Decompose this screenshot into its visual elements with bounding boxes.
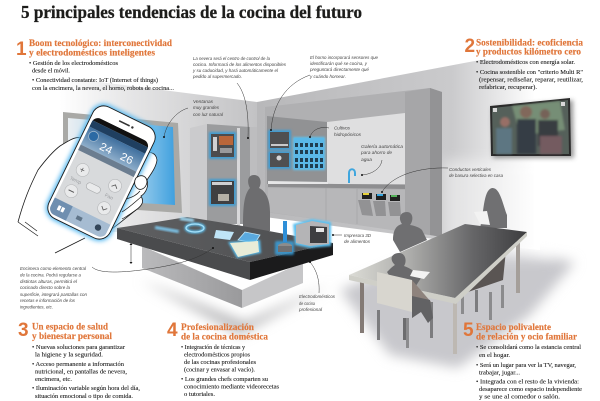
annotation: fridge: [192, 56, 287, 79]
annotation: professional appliances: de cocina: [299, 301, 315, 306]
annotation: automatic tap: Galería automática: [361, 144, 404, 149]
annotation: countertop: cocinado directo sobre la: [20, 285, 70, 290]
hand: [18, 138, 157, 253]
dining table: [349, 224, 527, 354]
phone glow: [41, 99, 162, 246]
island dark side: [250, 243, 333, 280]
heading 4: de la cocina doméstica: [181, 332, 268, 342]
seated woman silhouette: [480, 188, 507, 228]
window: [63, 112, 182, 213]
smart fridge: [190, 124, 257, 230]
remote buttons: Temp: [68, 175, 82, 186]
bullets 2: refabricar, recuperar).: [479, 84, 538, 91]
annotation leader lines: [92, 75, 448, 293]
hand holding smartphone: [18, 99, 162, 253]
remote buttons: [62, 161, 124, 217]
section 3: health and wellbeing: [18, 320, 141, 400]
heading 4: Profesionalización: [181, 323, 255, 333]
bullets 4: de las cocinas profesionales: [184, 359, 257, 366]
bullets 4: [181, 345, 280, 398]
annotation: professional appliances: Electrodomésticos: [299, 294, 336, 299]
temperature readouts: 24: [97, 141, 114, 157]
annotation: fridge: cocina. Informará de los alimentos disponibles: [193, 62, 287, 67]
bullets 4: • Los grandes chefs comparten su: [181, 376, 268, 383]
kitchen island: [117, 217, 333, 308]
bullets 2: • Cocina sostenible con "criterio Multi R": [476, 70, 583, 76]
bullets 5: • Se consolidará como la estancia central: [476, 345, 581, 351]
bullets 3: • Acceso permanente a información: [32, 361, 124, 368]
annotation: 3D printer: Impresora 3D: [344, 233, 372, 238]
number 1: 1: [16, 39, 27, 60]
bullets 5: • Integrada con el resto de la vivienda:: [476, 380, 579, 386]
annotation: 3D printer: de alimentos: [344, 239, 371, 244]
bullets 4: • Integración de técnicas y: [181, 345, 245, 351]
heading 3: [32, 322, 112, 342]
remote buttons: Fan: [104, 193, 114, 202]
bullets 1: • Gestión de los electrodomésticos: [29, 61, 119, 67]
kitchen illustration: [60, 60, 575, 368]
bullets 2: (repensar, rediseñar, reparar, reutilizar,: [479, 76, 584, 84]
bullets 3: situación emocional o tipo de comida.: [35, 394, 134, 400]
child silhouette: [387, 253, 421, 292]
phone body: [44, 102, 159, 243]
annotation: countertop: distintas alturas, permitirá el: [20, 279, 78, 284]
annotation: oven: y cuándo hornear.: [309, 74, 346, 79]
island front face: [117, 228, 250, 280]
bullets 1: con la encimera, la nevera, el horno, robots de cocina...: [32, 86, 175, 92]
annotation: automatic tap: para ahorro de: [360, 150, 393, 155]
remote buttons: +: [78, 164, 87, 175]
heading 2: Sostenibilidad: ecoficiencia: [476, 38, 583, 48]
bullets 1: [29, 61, 175, 92]
annotation: countertop: superficie, integrará pantallas con: [20, 292, 87, 297]
table top: [349, 224, 527, 298]
bullets 5: [476, 345, 582, 400]
table edge: [349, 232, 527, 304]
annotation: waste ducts: de basura selectiva en casa: [449, 173, 503, 178]
bullets 3: • Nuevas soluciones para garantizar: [32, 345, 125, 351]
3D food printer: [275, 221, 294, 255]
right wall: [257, 60, 540, 250]
thumb and fingers over phone: [135, 176, 147, 189]
annotation: countertop: recetas e información de los: [20, 298, 76, 303]
front chair: [377, 272, 433, 348]
heading 1: Boom tecnológico: interconectividad: [29, 39, 173, 49]
finger creases: [122, 191, 141, 219]
island countertop: [117, 217, 333, 262]
bullets 3: la higiene y la seguridad.: [35, 352, 104, 358]
bullets 5: y se une al comedor o salón.: [479, 394, 561, 400]
tab bar icons: [56, 205, 102, 232]
bullets 5: desaparece como espacio independiente: [479, 387, 582, 393]
bullets 3: [32, 345, 141, 400]
annotation: oven: preguntará directamente qué: [309, 67, 369, 72]
back wall unit: [265, 88, 442, 237]
touch surface screens: [155, 217, 261, 258]
fridge screen: order: [209, 179, 236, 206]
professional appliance: [293, 219, 331, 248]
annotation: windows: Ventanas: [193, 99, 214, 104]
heading 4: [181, 323, 268, 342]
annotation: windows: con luz natural: [193, 112, 224, 117]
back chair: [461, 240, 507, 320]
number 3: 3: [18, 320, 29, 341]
bullets 3: encimera, etc.: [35, 377, 73, 383]
number 5: 5: [463, 320, 474, 341]
seated man silhouette: [393, 212, 427, 252]
annotation: oven: identificarán qué se cocina, y: [310, 61, 368, 66]
annotation: hydroponic crops: hidropónicos: [334, 132, 362, 137]
paper: [410, 270, 430, 279]
bullets 1: desde el móvil.: [32, 68, 71, 74]
app screen: [48, 116, 150, 239]
section 2: sustainability: [464, 36, 584, 91]
heading 5: de relación y ocio familiar: [476, 332, 578, 342]
bullets 2: [476, 60, 584, 91]
section 1: technology boom: [16, 39, 175, 92]
annotation: countertop: Encimera como elemento central: [20, 266, 87, 271]
wall fade: [443, 160, 553, 260]
annotation: countertop: [20, 266, 87, 310]
bullets 5: en el hogar.: [479, 353, 511, 359]
bullets 5: • Será un lugar para ver la TV, navegar,: [476, 363, 577, 369]
waste bins: [358, 193, 401, 216]
bullets 3: • Iluminación variable según hora del día,: [32, 386, 141, 392]
annotation: fridge: pedido al supermercado.: [192, 74, 242, 79]
annotation: windows: [193, 99, 224, 117]
left wall: [60, 77, 257, 232]
heading 5: [476, 323, 578, 342]
heading 5: Espacio polivalente: [476, 323, 551, 333]
heading 2: y productos kilómetro cero: [476, 48, 581, 58]
section 5: multipurpose space: [463, 320, 582, 400]
heading 3: Un espacio de salud: [32, 322, 109, 332]
annotation: hydroponic crops: [334, 126, 362, 137]
wall TV: [490, 98, 574, 158]
floor shadows: [140, 240, 575, 368]
number 2: 2: [464, 36, 475, 57]
annotation: countertop: ingredientes, etc.: [20, 304, 53, 310]
annotation: fridge: La nevera será el centro de control de la: [193, 56, 270, 61]
annotation: oven: [309, 55, 378, 79]
annotation: waste ducts: Conductos verticales: [449, 167, 492, 172]
heading 2: [476, 38, 583, 58]
tap: [349, 169, 355, 183]
heading 3: y bienestar personal: [32, 332, 112, 342]
bullets 2: • Electrodomésticos con energía solar.: [476, 60, 576, 66]
speaker: [119, 120, 130, 127]
heading 1: y electrodomésticos inteligentes: [29, 48, 155, 58]
annotation: automatic tap: [360, 144, 404, 162]
annotation: waste ducts: [449, 167, 503, 178]
annotation: 3D printer: [344, 233, 372, 244]
smartphone: [41, 99, 162, 246]
annotation: professional appliances: [298, 294, 336, 312]
bullets 4: (cocinar y envasar al vacío).: [184, 366, 256, 374]
annotation: oven: El horno incorporará sensores que: [310, 55, 378, 60]
island base: [142, 246, 303, 308]
tablet: [474, 211, 490, 225]
bullets 3: nutricional, en pantallas de nevera,: [35, 370, 128, 376]
hydroponic crops panel: [293, 137, 325, 170]
bullets 4: electrodomésticos propios: [184, 352, 251, 358]
bullets 1: • Conectividad constante: IoT (Internet of things): [32, 77, 158, 84]
cabinets: [268, 181, 405, 232]
annotation: windows: muy grandes: [193, 105, 220, 110]
annotation: fridge: y su caducidad, y hará automáticamente el: [192, 68, 279, 73]
bullets 4: o tutoriales.: [184, 392, 216, 398]
table legs: [360, 240, 520, 354]
section 4: professionalisation: [167, 320, 280, 398]
annotation: countertop: de la cocina. Podrá regularse a: [20, 272, 81, 278]
bullets 4: conocimiento mediante videorecetas: [184, 384, 280, 390]
bullets 5: trabajar, jugar...: [479, 370, 521, 376]
standing person silhouette: [243, 175, 270, 231]
oven screen: light: [268, 151, 291, 169]
title: 5 principales tendencias de la cocina del futuro: [21, 2, 362, 22]
annotation: hydroponic crops: Cultivos: [334, 126, 351, 130]
fridge screen: groceries: [209, 132, 236, 159]
height adjustment arrow: [130, 243, 132, 264]
annotation: professional appliances: profesional: [298, 307, 323, 312]
annotation: automatic tap: agua: [361, 157, 373, 162]
number 4: 4: [167, 320, 178, 341]
oven screen: sensors: [268, 130, 291, 150]
smartphone: 26: [118, 151, 135, 167]
heading 1: [29, 39, 173, 58]
